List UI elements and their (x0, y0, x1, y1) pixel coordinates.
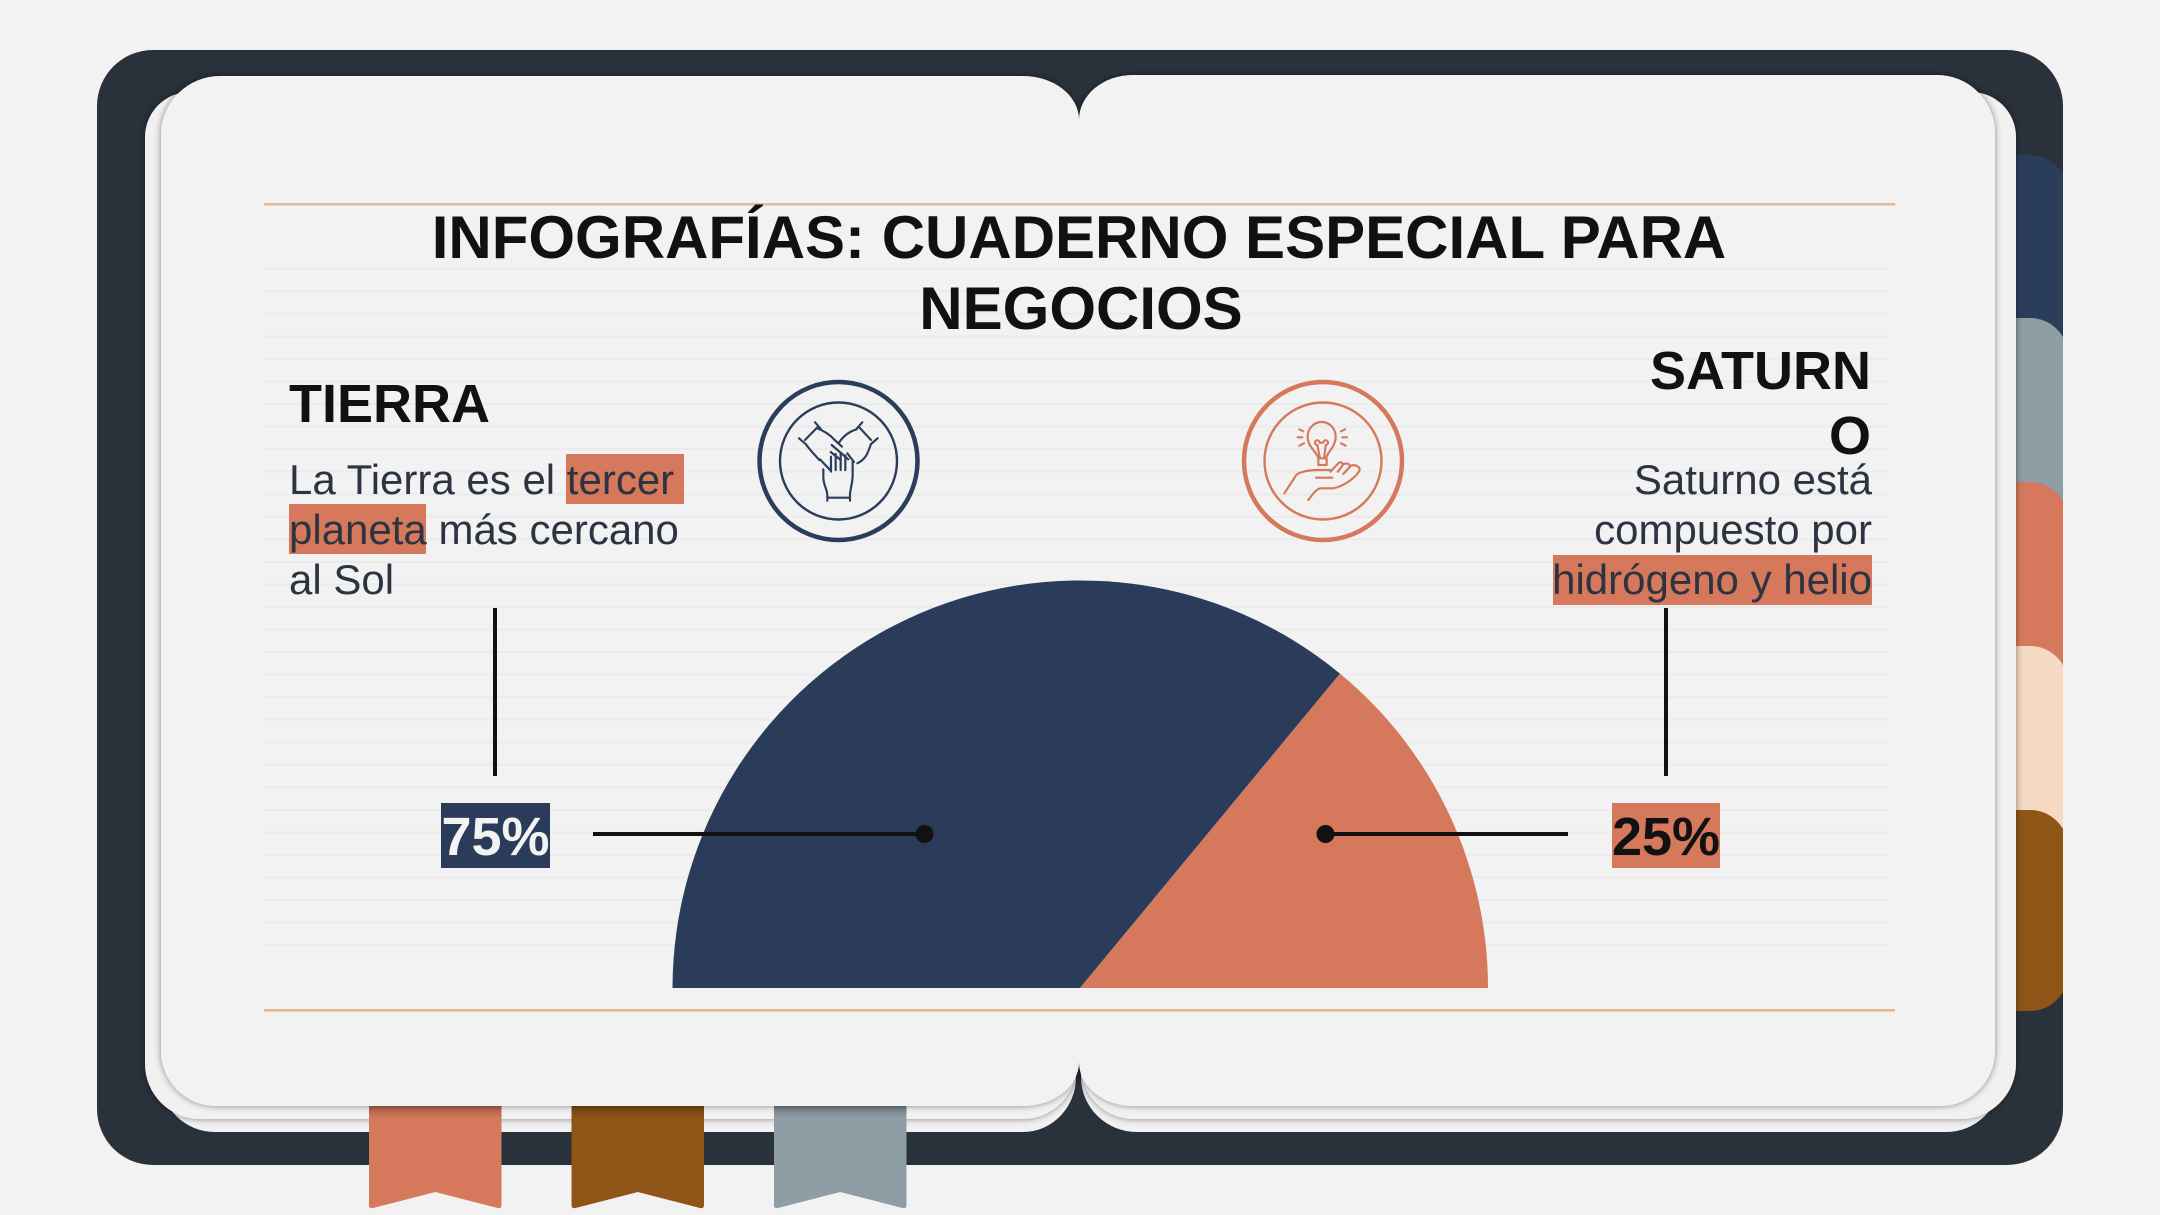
text highlight: hidrógeno y helio (1553, 555, 1872, 605)
leader line: 75% (593, 825, 934, 843)
tab: brown (2016, 810, 2063, 1011)
tab: peach (2016, 646, 2063, 828)
title: NEGOCIOS (919, 275, 1243, 342)
heading: Saturno: SATURN (1650, 341, 1871, 401)
body text: Saturno: hidrógeno y helio (1552, 556, 1872, 603)
body text: Saturno: compuesto por (1594, 506, 1872, 553)
text highlights: tercer planeta (289, 454, 684, 554)
bookmark: brown (572, 1106, 704, 1208)
bookmarks (369, 1106, 906, 1208)
body text: Saturno: Saturno está (1634, 456, 1873, 503)
title: INFOGRAFÍAS: CUADERNO ESPECIAL PARA (432, 204, 1726, 271)
leader line: 25% (1316, 825, 1568, 843)
bookmark: coral (369, 1106, 502, 1208)
chart segment: 25% coral (1080, 674, 1488, 988)
left column: Tierra (289, 374, 684, 603)
icon: joined hands (760, 382, 918, 540)
chart segment: 75% navy (672, 580, 1340, 988)
value label: 75%: 75% (441, 807, 550, 867)
right column: Saturno (1552, 341, 1873, 605)
notebook ruled lines (264, 269, 1888, 945)
value label: 25%: 25% (1612, 807, 1720, 867)
body text: Tierra: planeta más cercano (289, 506, 679, 553)
heading: Saturno: O (1829, 406, 1871, 466)
side index tabs (2016, 155, 2063, 1011)
icon: light bulb over hand (1244, 382, 1402, 540)
semicircle chart: 75% / 25% (672, 580, 1488, 988)
connector: Saturno to 25% (1664, 608, 1668, 776)
tab: navy (2016, 155, 2063, 337)
body text: Tierra: al Sol (289, 556, 394, 603)
tab: coral (2016, 482, 2063, 664)
body text: Tierra: La Tierra es el tercer (289, 456, 674, 503)
page stack: bottom sheet (160, 95, 2001, 1132)
front pages (161, 75, 1995, 1106)
heading: Tierra: TIERRA (289, 374, 490, 434)
connector: Tierra to 75% (493, 608, 497, 776)
bookmark: grey (774, 1106, 906, 1208)
tab: grey (2016, 318, 2063, 500)
page stack: middle sheet (145, 92, 2016, 1119)
